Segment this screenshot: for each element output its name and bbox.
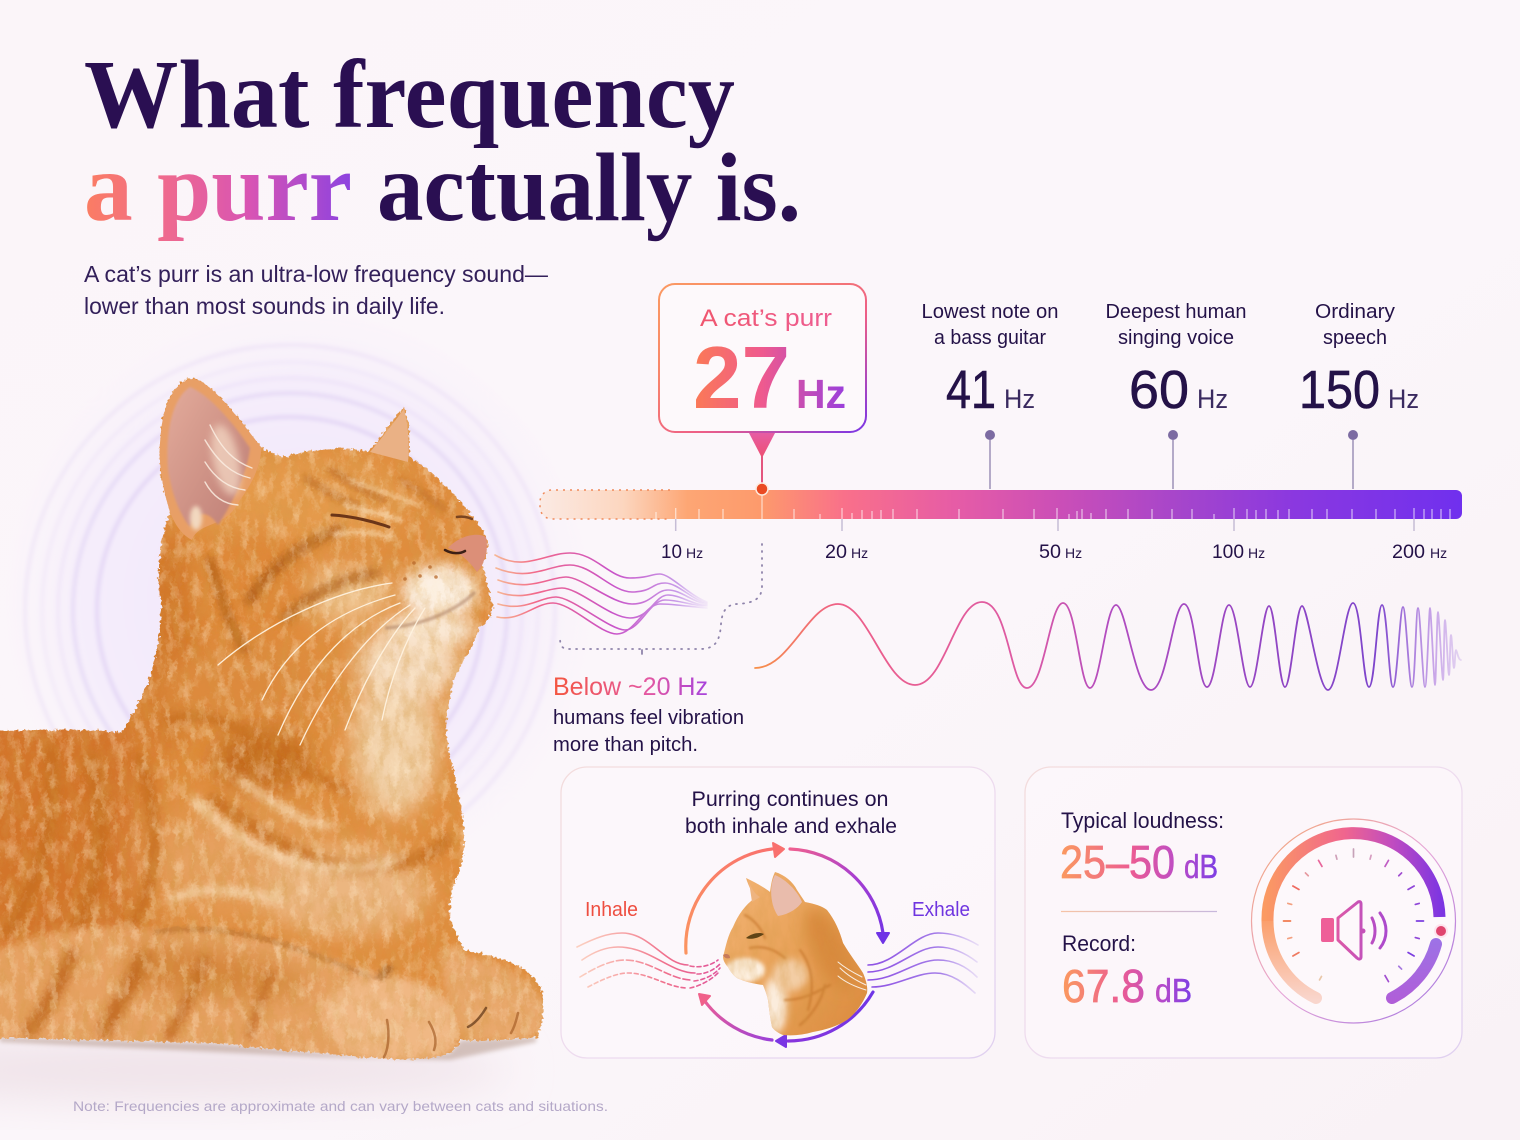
panel heading: Purring continues on [692,788,888,811]
small cat fur lines [838,962,866,990]
marker: bass guitar 41 Hz: Lowest note on [922,301,1058,323]
exhale airflow lines [868,933,978,993]
title: What frequency [84,41,735,149]
small cat ears [771,875,802,916]
title: actually is. [377,134,801,242]
scale labels: Hz [1430,545,1447,561]
marker: ordinary speech 150 Hz [1299,301,1419,489]
scale labels: Hz [1248,545,1265,561]
arrowheads [699,843,889,1047]
foreleg [0,926,458,1060]
toe lines [384,1008,518,1057]
whisker spots [403,561,438,581]
scale labels: 10 [661,542,682,563]
typical loudness: 25–50 [1060,836,1175,888]
rear paw [374,952,545,1042]
pin line to bar [761,456,763,486]
below 20 Hz note [553,673,744,756]
exhale label: Exhale [912,899,970,921]
panel: loudness [1025,767,1462,1058]
marker: bass guitar 41 Hz: Hz [1004,384,1035,414]
typical loudness [1060,808,1224,888]
callout: a cat's purr 27 Hz: Hz [796,371,846,417]
second ear [370,409,409,462]
cat floor shadow [0,1037,536,1060]
nose [445,535,487,572]
record loudness [1062,931,1192,1012]
frequency sweep waveform [755,602,1461,690]
marker: ordinary speech 150 Hz: Hz [1388,384,1419,414]
marker: human voice 60 Hz [1106,301,1246,489]
scale labels [661,542,1447,563]
bar ticks [656,490,1450,519]
fur stripes [10,470,446,960]
title [84,41,801,242]
panel heading [685,788,897,838]
panel: inhale and exhale [561,767,995,1058]
marker: bass guitar 41 Hz: 41 [946,360,996,420]
small cat eye [746,933,764,939]
record loudness: 67.8 [1062,960,1145,1012]
marker: ordinary speech 150 Hz: 150 [1299,360,1380,420]
scale labels: Hz [851,545,868,561]
breath waves from nose [495,553,707,634]
below 20 Hz note: more than pitch. [553,734,698,756]
mouth [385,592,475,628]
panel heading: both inhale and exhale [685,815,897,838]
record loudness: dB [1155,972,1192,1009]
floor shading [0,1040,510,1100]
footnote: Note: Frequencies are approximate and can vary between cats and situations. [73,1098,608,1114]
record loudness: Record: [1062,931,1136,956]
marker: ordinary speech 150 Hz: Ordinary [1315,301,1395,323]
ear inner [167,387,250,527]
scale labels: 20 [825,542,847,563]
divider [1061,910,1217,912]
sound rings behind cat [0,310,590,910]
small cat portrait [723,872,868,1036]
scale labels: 50 [1039,542,1061,563]
subtitle: lower than most sounds in daily life. [84,293,445,319]
frequency gradient bar [540,483,1462,531]
small cat nose [723,954,730,958]
scale labels: Hz [1065,545,1082,561]
gauge ticks [1284,849,1424,982]
dotted connector [560,544,762,654]
whiskers [218,583,425,745]
title: a purr [84,134,352,242]
typical loudness: dB [1184,848,1218,885]
crease above foreleg [154,929,385,985]
ear fur [190,422,252,530]
inhale label: Inhale [585,899,638,921]
scale labels: 100 [1212,542,1244,563]
cream chest and muzzle [353,675,437,815]
marker: ordinary speech 150 Hz: speech [1323,327,1387,349]
closed eye [332,515,389,527]
marker: bass guitar 41 Hz: a bass guitar [934,327,1046,349]
marker: human voice 60 Hz: 60 [1129,360,1189,420]
below 20 Hz note: Below ~20 Hz [553,673,708,701]
callout: a cat's purr 27 Hz [659,284,866,458]
fur texture [0,370,560,1070]
ear rim [160,379,261,540]
below 20 Hz note: humans feel vibration [553,707,744,729]
far eye [457,517,472,519]
cat illustration [0,370,560,1070]
dotted low-range edge [540,490,670,519]
marker: human voice 60 Hz: Hz [1197,384,1228,414]
loudness gauge [1252,819,1456,1023]
big paw [323,976,458,1060]
scale labels: Hz [686,545,703,561]
callout pointer [749,433,775,458]
subtitle: A cat’s purr is an ultra-low frequency sound— [84,261,548,287]
inhale airflow lines [577,933,720,988]
soft colour zones [0,455,478,960]
marker: human voice 60 Hz: Deepest human [1106,301,1246,323]
marker dot [756,483,768,495]
subtitle [84,261,548,319]
callout: a cat's purr 27 Hz: 27 [693,328,790,427]
callout: a cat's purr 27 Hz: A cat’s purr [700,305,832,332]
speaker icon [1321,902,1386,959]
typical loudness: Typical loudness: [1061,808,1224,833]
scale labels: 200 [1392,542,1425,563]
marker: human voice 60 Hz: singing voice [1118,327,1234,349]
breathing cycle arrows [686,849,883,1041]
marker: bass guitar 41 Hz [922,301,1058,489]
